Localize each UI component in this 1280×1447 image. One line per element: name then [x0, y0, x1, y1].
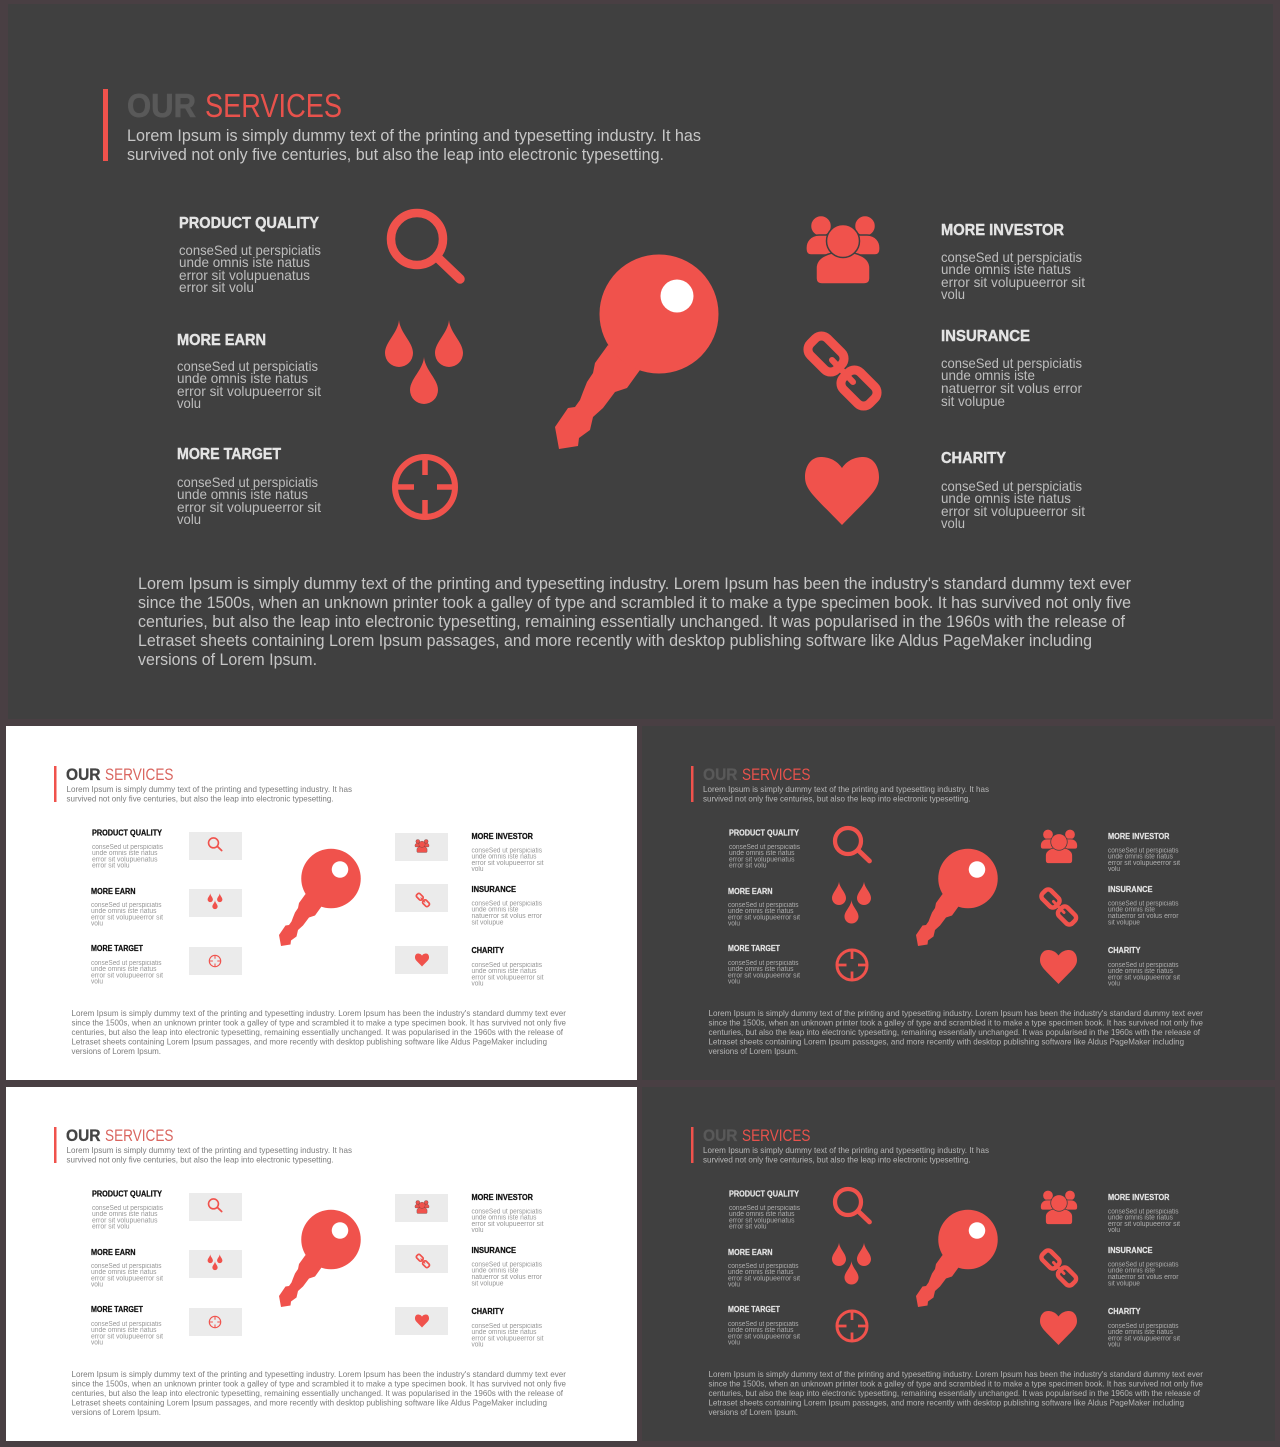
paragraph: centuries, but also the leap into electronic typesetting, remaining essentially unchanged. It was popularised in the 1960s with the release of [138, 612, 1125, 631]
icon tile: people [395, 833, 448, 861]
icon: people [1040, 1190, 1078, 1224]
icon tile: chain [395, 1245, 448, 1273]
service: more earn: unde omnis iste natus [728, 908, 794, 915]
service: insurance: natuerror sit volus error [472, 1274, 543, 1281]
service: insurance: INSURANCE [1108, 885, 1153, 894]
paragraph: versions of Lorem Ipsum. [708, 1046, 798, 1056]
paragraph: centuries, but also the leap into electronic typesetting, remaining essentially unchanged. It was popularised in the 1960s with the release of [708, 1027, 1201, 1037]
service: charity: unde omnis iste natus [941, 490, 1071, 506]
service: charity: conseSed ut perspiciatis [1108, 1323, 1179, 1330]
service: more investor: conseSed ut perspiciatis [472, 1208, 542, 1216]
service: charity: unde omnis iste natus [472, 1329, 537, 1336]
title: SERVICES [205, 87, 342, 124]
service: more investor: conseSed ut perspiciatis [1108, 848, 1179, 854]
service: insurance: conseSed ut perspiciatis [472, 1262, 542, 1268]
icon: magnifier [835, 828, 870, 861]
service: more earn: MORE EARN [728, 1248, 773, 1257]
service: more target: conseSed ut perspiciatis [91, 960, 162, 967]
paragraph: versions of Lorem Ipsum. [708, 1407, 798, 1417]
service: more investor: unde omnis iste natus [472, 1214, 537, 1222]
service: product quality: unde omnis iste natus [729, 850, 795, 857]
paragraph: centuries, but also the leap into electronic typesetting, remaining essentially unchanged. It was popularised in the 1960s with the release of [708, 1388, 1201, 1398]
service: more investor: MORE INVESTOR [472, 1193, 533, 1202]
service: more investor [472, 1193, 544, 1234]
service: product quality: PRODUCT QUALITY [729, 1190, 800, 1198]
title: OUR [66, 766, 101, 784]
service: more investor: MORE INVESTOR [1108, 832, 1170, 841]
paragraph [708, 1369, 1203, 1417]
paragraph: since the 1500s, when an unknown printer took a galley of type and scrambled it to make a type specimen book. It has survived not only five [708, 1018, 1203, 1028]
service: more earn: conseSed ut perspiciatis [728, 902, 799, 909]
panel: light slide, row 2 [6, 726, 637, 1080]
service: more earn: unde omnis iste natus [91, 1269, 157, 1276]
paragraph: since the 1500s, when an unknown printer took a galley of type and scrambled it to make a type specimen book. It has survived not only five [72, 1378, 566, 1388]
service: more target: MORE TARGET [177, 446, 281, 463]
service: product quality: PRODUCT QUALITY [179, 215, 319, 232]
icon: heart [1040, 950, 1077, 984]
service: product quality: error sit volu [92, 862, 130, 870]
service: charity: conseSed ut perspiciatis [472, 1323, 542, 1330]
service: more earn [91, 887, 163, 928]
paragraph: Lorem Ipsum is simply dummy text of the printing and typesetting industry. Lorem Ipsum has been the industry's standard dummy text ever [708, 1369, 1203, 1379]
service: product quality: error sit volupuenatus [729, 1218, 795, 1224]
service: insurance: unde omnis iste [1108, 1268, 1155, 1274]
service: charity: unde omnis iste natus [472, 968, 537, 975]
service: more earn [728, 1248, 800, 1288]
service: product quality: unde omnis iste natus [92, 1211, 158, 1218]
subtitle: Lorem Ipsum is simply dummy text of the printing and typesetting industry. It has [66, 784, 352, 794]
service: more investor: unde omnis iste natus [1108, 854, 1173, 860]
subtitle: Lorem Ipsum is simply dummy text of the printing and typesetting industry. It has [127, 126, 701, 145]
service: more investor: error sit volupueerror sit [1108, 1221, 1180, 1228]
service: more investor [941, 222, 1085, 302]
paragraph: Letraset sheets containing Lorem Ipsum passages, and more recently with desktop publishing software like Aldus PageMaker including [708, 1036, 1184, 1046]
icon: target [395, 457, 455, 517]
paragraph: versions of Lorem Ipsum. [138, 650, 317, 669]
title: SERVICES [742, 1127, 810, 1145]
service: insurance: conseSed ut perspiciatis [941, 355, 1082, 371]
icon tile: magnifier [189, 832, 242, 860]
service: more earn [728, 887, 800, 928]
service: more target: volu [91, 1340, 103, 1346]
service: more target: MORE TARGET [728, 1305, 780, 1314]
service: more target: MORE TARGET [728, 944, 780, 953]
service: insurance: conseSed ut perspiciatis [1108, 1262, 1179, 1268]
service: product quality: unde omnis iste natus [729, 1211, 795, 1218]
service: charity: CHARITY [941, 450, 1006, 467]
service: more investor: error sit volupueerror sit [472, 860, 544, 867]
service: more earn: conseSed ut perspiciatis [91, 902, 162, 909]
paragraph: centuries, but also the leap into electronic typesetting, remaining essentially unchanged. It was popularised in the 1960s with the release of [72, 1027, 564, 1037]
paragraph [708, 1008, 1203, 1056]
icon tile: target [189, 1308, 242, 1336]
service: product quality: PRODUCT QUALITY [729, 828, 800, 838]
subtitle: survived not only five centuries, but also the leap into electronic typesetting. [127, 145, 664, 164]
service: product quality: error sit volupuenatus [179, 267, 310, 283]
title [66, 1127, 174, 1145]
service: more earn: unde omnis iste natus [91, 908, 157, 915]
paragraph: Letraset sheets containing Lorem Ipsum passages, and more recently with desktop publishing software like Aldus PageMaker including [138, 631, 1092, 650]
paragraph: Lorem Ipsum is simply dummy text of the printing and typesetting industry. Lorem Ipsum has been the industry's standard dummy text ever [72, 1008, 566, 1018]
icon: people [1040, 829, 1078, 864]
service: more investor: volu [941, 286, 965, 302]
paragraph: Lorem Ipsum is simply dummy text of the printing and typesetting industry. Lorem Ipsum has been the industry's standard dummy text ever [708, 1008, 1203, 1018]
service: charity [1108, 946, 1180, 988]
title: SERVICES [105, 766, 174, 784]
service: product quality: unde omnis iste natus [179, 254, 310, 270]
service: more investor: unde omnis iste natus [1108, 1214, 1173, 1222]
subtitle [66, 784, 352, 804]
paragraph: since the 1500s, when an unknown printer took a galley of type and scrambled it to make a type specimen book. It has survived not only five [138, 593, 1131, 612]
title: OUR [703, 766, 738, 784]
panel: large dark slide [8, 4, 1273, 719]
subtitle [127, 126, 701, 164]
service: product quality: PRODUCT QUALITY [92, 1190, 163, 1198]
subtitle: survived not only five centuries, but also the leap into electronic typesetting. [66, 794, 334, 804]
title [703, 766, 810, 784]
panel: light slide, row 3 [6, 1087, 637, 1441]
paragraph [138, 574, 1131, 669]
service: charity: error sit volupueerror sit [1108, 974, 1180, 982]
icon: drops [832, 1242, 871, 1284]
service: more target: volu [177, 511, 201, 527]
service: more earn: volu [728, 1282, 740, 1288]
service: more target: error sit volupueerror sit [91, 1334, 163, 1340]
service: more investor: error sit volupueerror sit [472, 1221, 544, 1228]
service: insurance: sit volupue [941, 393, 1005, 409]
service: charity: CHARITY [472, 1307, 505, 1316]
paragraph: Lorem Ipsum is simply dummy text of the printing and typesetting industry. Lorem Ipsum has been the industry's standard dummy text ever [72, 1369, 566, 1379]
subtitle [703, 784, 989, 804]
icon: key [916, 1210, 998, 1307]
subtitle: Lorem Ipsum is simply dummy text of the printing and typesetting industry. It has [703, 1145, 989, 1155]
paragraph: Letraset sheets containing Lorem Ipsum passages, and more recently with desktop publishing software like Aldus PageMaker including [72, 1398, 547, 1408]
paragraph [72, 1369, 566, 1417]
title [703, 1127, 810, 1145]
service: insurance: INSURANCE [941, 328, 1030, 345]
service: insurance: unde omnis iste [941, 367, 1035, 383]
service: charity: conseSed ut perspiciatis [1108, 962, 1179, 969]
service: more earn: volu [728, 920, 740, 928]
icon: key [916, 849, 998, 946]
paragraph: since the 1500s, when an unknown printer took a galley of type and scrambled it to make a type specimen book. It has survived not only five [708, 1378, 1203, 1388]
icon tile: target [189, 947, 242, 975]
service: insurance: sit volupue [1108, 920, 1140, 926]
icon tile: drops [189, 1250, 242, 1278]
icon: key [279, 849, 361, 946]
paragraph [72, 1008, 566, 1056]
service: more target: unde omnis iste natus [91, 1327, 157, 1334]
service: product quality: conseSed ut perspiciatis [92, 844, 163, 851]
title [66, 766, 174, 784]
service: charity: CHARITY [1108, 946, 1141, 955]
subtitle [703, 1145, 989, 1164]
subtitle: survived not only five centuries, but also the leap into electronic typesetting. [66, 1154, 334, 1164]
icon: chain [1040, 888, 1078, 926]
icon: chain [1040, 1249, 1078, 1287]
icon: target [837, 1311, 867, 1341]
service: charity [941, 450, 1085, 531]
service: more earn: error sit volupueerror sit [91, 1276, 163, 1282]
subtitle: Lorem Ipsum is simply dummy text of the printing and typesetting industry. It has [703, 784, 989, 794]
service: more earn: conseSed ut perspiciatis [728, 1263, 799, 1270]
service: charity: CHARITY [472, 946, 505, 955]
service: more investor: volu [472, 1227, 484, 1234]
title: OUR [66, 1127, 101, 1145]
panel: dark slide, row 3 [642, 1087, 1275, 1441]
icon: chain [804, 332, 881, 410]
panel: dark slide, row 2 [642, 726, 1275, 1080]
service: more target: conseSed ut perspiciatis [91, 1321, 162, 1328]
service: charity [472, 946, 544, 988]
icon: magnifier [835, 1189, 870, 1222]
service: charity: volu [472, 980, 484, 988]
icon: heart [1040, 1311, 1077, 1345]
service: more investor: MORE INVESTOR [472, 832, 533, 841]
service: more investor: volu [472, 866, 484, 873]
icon: people [806, 216, 880, 284]
icon tile: heart [395, 946, 448, 974]
icon: key [279, 1210, 361, 1307]
service: product quality [729, 1190, 800, 1230]
service: insurance [472, 885, 543, 926]
icon: drops [385, 320, 463, 404]
service: insurance: sit volupue [1108, 1280, 1140, 1288]
service: product quality: conseSed ut perspiciatis [729, 1205, 800, 1212]
service: charity: CHARITY [1108, 1307, 1141, 1316]
service: more earn: error sit volupueerror sit [91, 914, 163, 922]
service: more investor: conseSed ut perspiciatis [1108, 1208, 1179, 1216]
service: more target: error sit volupueerror sit [91, 972, 163, 980]
service: more target: volu [91, 978, 103, 986]
service: more target: volu [728, 978, 740, 986]
service: more investor [472, 832, 544, 873]
service: more earn: error sit volupueerror sit [728, 914, 800, 922]
service: more investor: volu [1108, 866, 1120, 873]
service: more target: volu [728, 1340, 740, 1346]
service: more earn: volu [91, 1282, 103, 1288]
service: more target: MORE TARGET [91, 1305, 143, 1314]
service: more target: unde omnis iste natus [728, 1327, 794, 1334]
service: insurance [1108, 1246, 1179, 1288]
paragraph: Letraset sheets containing Lorem Ipsum passages, and more recently with desktop publishing software like Aldus PageMaker including [72, 1036, 547, 1046]
service: more target [728, 1305, 800, 1346]
service: charity: volu [1108, 1342, 1120, 1348]
service: product quality: error sit volu [729, 1224, 767, 1230]
service: more target: conseSed ut perspiciatis [177, 474, 318, 490]
icon: target [837, 950, 867, 980]
service: more investor: MORE INVESTOR [1108, 1193, 1170, 1202]
service: insurance: sit volupue [472, 920, 504, 926]
service: charity: volu [472, 1342, 484, 1348]
service: more investor [1108, 832, 1180, 873]
service: more target: error sit volupueerror sit [728, 1334, 800, 1340]
service: insurance [472, 1246, 543, 1288]
icon tile: magnifier [189, 1193, 242, 1221]
service: more earn: unde omnis iste natus [177, 370, 308, 386]
service: product quality: conseSed ut perspiciatis [729, 844, 800, 851]
service: charity: volu [941, 515, 965, 531]
service: product quality: error sit volu [179, 279, 254, 295]
service: more investor: unde omnis iste natus [941, 261, 1071, 277]
service: charity: conseSed ut perspiciatis [472, 962, 542, 969]
service: more earn: MORE EARN [177, 332, 266, 349]
service: more target: error sit volupueerror sit [728, 972, 800, 980]
paragraph: versions of Lorem Ipsum. [72, 1407, 161, 1417]
service: more target: unde omnis iste natus [728, 966, 794, 973]
icon tile: people [395, 1194, 448, 1222]
service: more investor: conseSed ut perspiciatis [941, 249, 1082, 265]
service: insurance: conseSed ut perspiciatis [1108, 900, 1179, 908]
service: more earn: MORE EARN [728, 887, 773, 896]
service: insurance: natuerror sit volus error [1108, 1274, 1179, 1281]
service: more earn: error sit volupueerror sit [177, 383, 321, 399]
service: charity: error sit volupueerror sit [472, 974, 544, 982]
service: more investor: error sit volupueerror sit [1108, 860, 1180, 867]
paragraph: versions of Lorem Ipsum. [72, 1046, 161, 1056]
service: more earn: MORE EARN [91, 1248, 136, 1257]
icon tile: heart [395, 1307, 448, 1335]
service: more earn: conseSed ut perspiciatis [177, 358, 318, 374]
service: more earn: unde omnis iste natus [728, 1269, 794, 1276]
service: insurance [941, 328, 1082, 409]
service: insurance: conseSed ut perspiciatis [472, 900, 542, 908]
subtitle: survived not only five centuries, but also the leap into electronic typesetting. [703, 794, 970, 804]
service: insurance: natuerror sit volus error [1108, 913, 1179, 920]
service: product quality: conseSed ut perspiciatis [92, 1205, 163, 1212]
service: charity: error sit volupueerror sit [941, 503, 1085, 519]
service: more target [91, 1305, 163, 1346]
service: more investor: unde omnis iste natus [472, 854, 537, 860]
icon tile: chain [395, 884, 448, 912]
service: more target: MORE TARGET [91, 944, 143, 953]
service: product quality: error sit volupuenatus [92, 856, 158, 864]
paragraph: centuries, but also the leap into electronic typesetting, remaining essentially unchanged. It was popularised in the 1960s with the release of [72, 1388, 564, 1398]
service: more target: conseSed ut perspiciatis [728, 960, 799, 967]
service: charity: error sit volupueerror sit [1108, 1336, 1180, 1342]
service: product quality: error sit volu [729, 862, 767, 870]
service: insurance: natuerror sit volus error [472, 913, 543, 920]
title: OUR [127, 87, 196, 124]
subtitle [66, 1145, 352, 1164]
service: charity: unde omnis iste natus [1108, 968, 1173, 975]
service: product quality: error sit volupuenatus [729, 856, 795, 864]
paragraph: Lorem Ipsum is simply dummy text of the printing and typesetting industry. Lorem Ipsum has been the industry's standard dummy text ever [138, 574, 1131, 593]
service: more earn: conseSed ut perspiciatis [91, 1263, 162, 1270]
service: insurance: unde omnis iste [472, 1268, 519, 1274]
service: charity: volu [1108, 980, 1120, 988]
service: more target: unde omnis iste natus [177, 486, 308, 502]
service: more earn [177, 332, 321, 411]
icon: magnifier [391, 213, 460, 279]
service: charity [1108, 1307, 1180, 1348]
service: more earn: error sit volupueerror sit [728, 1276, 800, 1282]
service: more target [728, 944, 800, 986]
service: product quality: error sit volupuenatus [92, 1218, 158, 1224]
service: product quality: error sit volu [92, 1224, 130, 1230]
service: more investor: volu [1108, 1227, 1120, 1234]
title: SERVICES [105, 1127, 174, 1145]
icon: drops [832, 882, 871, 924]
service: charity: unde omnis iste natus [1108, 1329, 1173, 1336]
service: charity: error sit volupueerror sit [472, 1336, 544, 1342]
service: insurance: unde omnis iste [472, 906, 519, 914]
service: product quality: unde omnis iste natus [92, 850, 158, 857]
service: product quality [92, 1190, 163, 1230]
title: OUR [703, 1127, 738, 1145]
service: insurance: INSURANCE [1108, 1246, 1153, 1255]
service: product quality [92, 828, 163, 870]
service: charity: conseSed ut perspiciatis [941, 478, 1082, 494]
subtitle: survived not only five centuries, but also the leap into electronic typesetting. [703, 1154, 970, 1164]
service: insurance: natuerror sit volus error [941, 380, 1082, 396]
service: more target: unde omnis iste natus [91, 966, 157, 973]
service: more earn: MORE EARN [91, 887, 136, 896]
service: product quality: PRODUCT QUALITY [92, 828, 163, 838]
service: insurance: unde omnis iste [1108, 906, 1155, 914]
service: insurance [1108, 885, 1179, 926]
service: charity [472, 1307, 544, 1348]
service: insurance: INSURANCE [472, 885, 517, 894]
service: insurance: sit volupue [472, 1280, 504, 1288]
service: more target: error sit volupueerror sit [177, 499, 321, 515]
service: more earn: volu [177, 395, 201, 411]
service: product quality [729, 828, 800, 870]
icon: key [555, 254, 718, 449]
subtitle: Lorem Ipsum is simply dummy text of the printing and typesetting industry. It has [66, 1145, 352, 1155]
title [127, 87, 342, 124]
icon tile: drops [189, 889, 242, 917]
paragraph: Letraset sheets containing Lorem Ipsum passages, and more recently with desktop publishing software like Aldus PageMaker including [708, 1398, 1184, 1408]
service: more investor: MORE INVESTOR [941, 222, 1064, 239]
service: more earn [91, 1248, 163, 1288]
service: more target: conseSed ut perspiciatis [728, 1321, 799, 1328]
service: more earn: volu [91, 920, 103, 928]
icon: heart [805, 457, 879, 525]
service: more target [91, 944, 163, 986]
paragraph: since the 1500s, when an unknown printer took a galley of type and scrambled it to make a type specimen book. It has survived not only five [72, 1018, 566, 1028]
service: insurance: INSURANCE [472, 1246, 517, 1255]
service: product quality [179, 215, 321, 295]
title: SERVICES [742, 766, 810, 784]
service: more investor: conseSed ut perspiciatis [472, 848, 542, 854]
accent bar [103, 89, 108, 161]
service: more target [177, 446, 321, 527]
service: more investor: error sit volupueerror sit [941, 274, 1085, 290]
service: more investor [1108, 1193, 1180, 1234]
service: product quality: conseSed ut perspiciatis [179, 242, 321, 258]
